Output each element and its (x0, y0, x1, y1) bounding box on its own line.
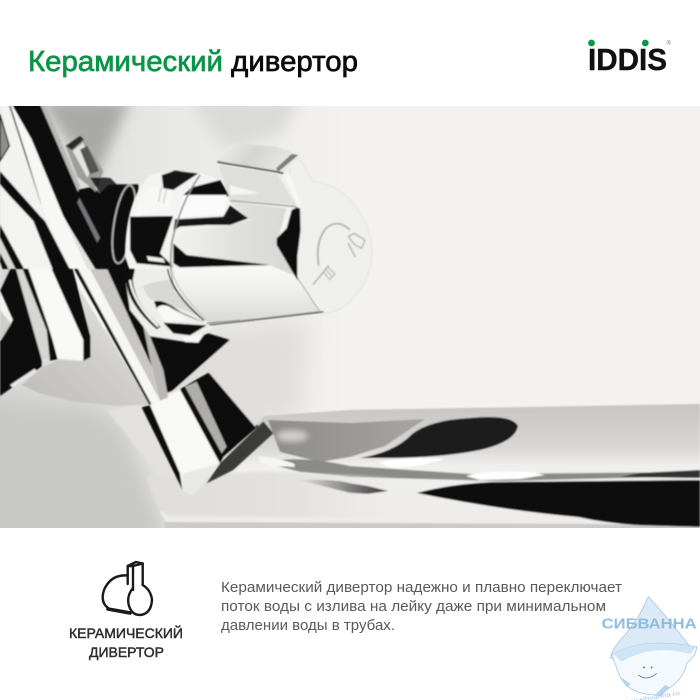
shadow column under knob (107, 407, 400, 517)
lower zone (184, 296, 318, 322)
mid gray zone (200, 202, 295, 276)
knob cap (217, 145, 290, 174)
ribbed band (90, 269, 159, 399)
knob (125, 143, 372, 334)
icon: ceramic diverter (103, 562, 152, 615)
knob face (296, 183, 372, 312)
white band lower (4, 187, 54, 270)
white band (12, 106, 88, 270)
button (66, 136, 103, 192)
white strip (74, 269, 161, 405)
black neck lower (150, 333, 230, 393)
icon label: ДИВЕРТОР (89, 644, 164, 660)
title: Керамический дивертор (28, 46, 358, 78)
streak two (173, 243, 270, 267)
thin line (9, 104, 42, 204)
gray base (22, 287, 150, 406)
photo: chrome faucet diverter (0, 100, 700, 560)
upper faucet body (0, 104, 140, 329)
spout (160, 404, 700, 530)
bottom edge (207, 312, 323, 325)
black side (277, 206, 301, 280)
light stripe (143, 327, 168, 401)
description text: давлении воды в трубах. (221, 618, 395, 634)
watermark: sibvanna: СИБВАННА (602, 617, 697, 633)
logo: iddis: ® (666, 40, 672, 47)
knob body (125, 171, 323, 334)
gray stripe beside band (40, 104, 80, 192)
neck ring (110, 184, 137, 266)
black wedge (0, 171, 86, 329)
gray rim top left (0, 114, 9, 161)
watermark: sibvanna (602, 597, 697, 700)
black main band and neck (12, 104, 140, 329)
lower faucet body and knob base (0, 269, 242, 406)
chrome base (0, 106, 67, 324)
icon label: КЕРАМИЧЕСКИЙ (69, 624, 183, 641)
streak one (173, 205, 248, 231)
diverter block (141, 372, 296, 494)
black wedge top (162, 171, 198, 190)
knob base ring (126, 269, 213, 342)
logo: iddis: IDDIS (588, 43, 667, 77)
black lower-left (0, 224, 46, 328)
description text: поток воды с излива на лейку даже при минимальном (221, 599, 606, 615)
description text: Керамический дивертор надежно и плавно переключает (221, 580, 622, 596)
collar left (168, 188, 172, 190)
collar arc (171, 175, 200, 290)
knob engraved symbol (313, 224, 365, 284)
